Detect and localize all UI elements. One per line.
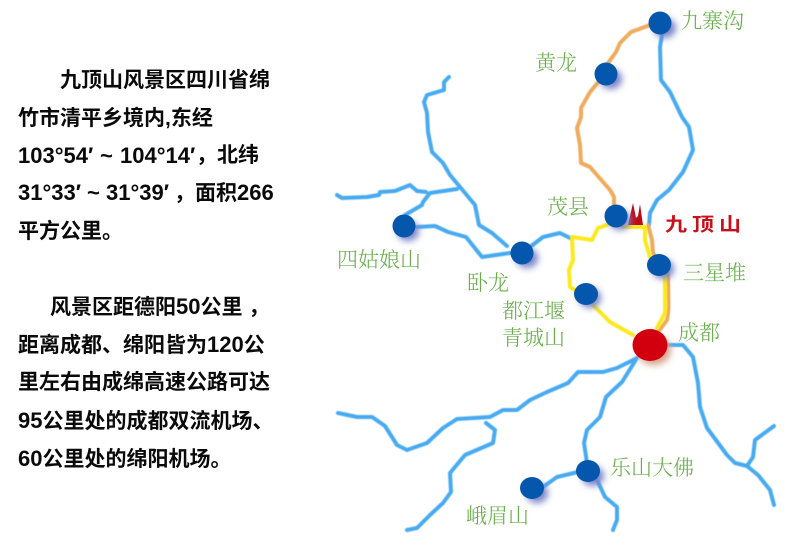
label: Wolong: 卧龙 <box>467 267 509 297</box>
label: Emeishan: 峨眉山 <box>466 500 529 530</box>
text block: location and area: 104°14′ <box>120 143 195 168</box>
text block: distance and transport: 距离成都、绵阳皆为120公 <box>18 332 265 357</box>
orange route: Jiuzhaigou to Maoxian <box>577 25 650 212</box>
label: Jiuzhaigou: 九寨沟 <box>681 5 744 35</box>
text block: distance and transport: 60公里处的绵阳机场。 <box>18 446 231 471</box>
text block: location and area: 31°33′ <box>18 180 81 205</box>
text block: location and area: 平方公里。 <box>18 220 123 243</box>
label: Leshan Giant Buddha: 乐山大佛 <box>610 452 694 482</box>
text block: location and area: 103°54′ <box>18 143 93 168</box>
orange route: Jiudingshan to Chengdu <box>648 225 669 331</box>
icon: red mountain peaks <box>628 203 643 225</box>
label: Chengdu: 成都 <box>678 317 720 347</box>
text block: location and area: 九顶山风景区四川省绵 <box>60 69 270 92</box>
text block: location and area: ，北纬 <box>196 144 259 167</box>
label: Siguniangshan: 四姑娘山 <box>337 244 421 274</box>
text block: distance and transport: 95公里处的成都双流机场、 <box>18 408 273 433</box>
marker: Chengdu <box>632 329 671 365</box>
marker: Maoxian <box>604 204 631 230</box>
text block: distance and transport: 里左右由成绵高速公路可达 <box>18 371 270 394</box>
text block: location and area <box>18 68 274 243</box>
text block: distance and transport <box>18 294 273 471</box>
text block: location and area: 31°39′ <box>106 180 169 205</box>
marker: Emeishan <box>520 477 548 503</box>
text block: distance and transport: 风景区距德阳50公里 ， <box>50 294 269 319</box>
marker: Huanglong <box>594 62 622 89</box>
text block: location and area: ，面积266 <box>174 180 274 205</box>
marker: Siguniangshan <box>392 214 419 241</box>
text block: location and area: 竹市清平乡境内,东经 <box>18 107 213 130</box>
label: Huanglong: 黄龙 <box>535 47 577 77</box>
label: Maoxian: 茂县 <box>547 191 589 221</box>
rivers <box>337 35 774 530</box>
label: Jiudingshan: 九顶山 <box>665 209 746 236</box>
marker: Sanxingdui <box>647 254 674 279</box>
yellow routes <box>569 225 665 335</box>
label: Dujiangyan: 都江堰 <box>502 295 565 325</box>
text block: location and area: ~ <box>87 180 100 205</box>
marker: Jiuzhaigou <box>648 12 676 38</box>
label: Qingchengshan: 青城山 <box>502 322 565 352</box>
text block: location and area: ~ <box>100 143 113 168</box>
marker: Dujiangyan <box>574 283 601 308</box>
label: Sanxingdui: 三星堆 <box>683 257 746 287</box>
marker: Wolong <box>510 242 538 268</box>
marker: Leshan Giant Buddha <box>576 460 604 486</box>
